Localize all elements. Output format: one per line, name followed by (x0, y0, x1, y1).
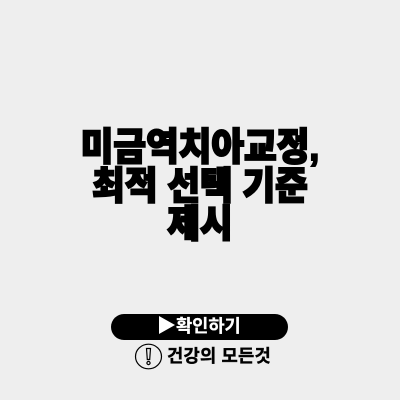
title (81, 126, 319, 245)
caption: 건강의 모든것: 건강의 모든것 (167, 346, 271, 366)
icon: exclamation circle (134, 344, 162, 370)
title line 3: 제시 (167, 203, 233, 245)
button label: 확인하기 (176, 316, 241, 336)
icon: play triangle (159, 316, 175, 334)
title line 1: 미금역치아교정, (81, 126, 319, 168)
button: 확인하기 (111, 314, 288, 340)
title line 2: 최적 선택 기준 (92, 164, 308, 207)
